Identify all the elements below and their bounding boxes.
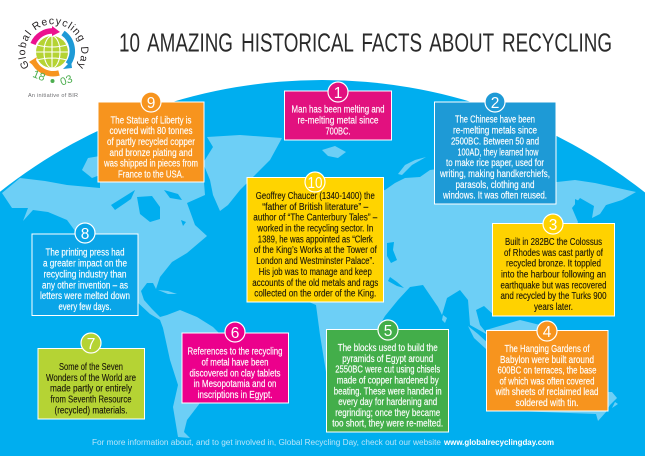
fact 5 text: regrinding; once they became [335,408,441,419]
fact 8 text: a greater impact on the [43,259,127,270]
fact 1 text: 700BC. [326,127,350,138]
fact 10 text: accounts of the old metals and rags [252,278,378,289]
panel: fact 9 [98,92,204,182]
footer: For more information about, and to get involved in, Global Recycling Day, check out our website [92,437,441,447]
fact 2 text: re-melting metals since [453,126,537,137]
badge 4: 4 [543,324,552,341]
panel: fact 3 [492,214,614,316]
fact 7 text: from Seventh Resource [50,394,132,406]
fact 1 text: Man has been melting and [292,105,384,116]
fact 6 text [188,347,282,401]
panel: fact 8 [32,223,138,316]
panel: fact 5 [326,320,448,432]
fact 5 text: pyramids of Egypt around [342,354,433,365]
fact 1 text [292,105,384,138]
fact 9 text: was shipped in pieces from [103,159,198,170]
fact 6 text: discovered on clay tablets [190,368,280,379]
fact 5 text [332,343,443,430]
fact 8 text [40,248,130,313]
fact 6 text: in Mesopotamia and on [194,379,276,390]
footer: www.globalrecyclingday.com [443,437,554,447]
fact 3 text: Built in 282BC the Colossus [505,237,602,248]
panel: fact 1 [284,82,392,140]
fact 7 text: Wonders of the World are [46,373,136,384]
fact 10 text: “father of British literature” – [262,202,369,213]
badge 1: 1 [334,85,342,102]
fact 4 text: of which was often covered [500,376,594,387]
fact 4 text [495,344,598,409]
fact 10 text: Geoffrey Chaucer (1340-1400) the [256,191,375,202]
fact 10 text: author of “The Canterbury Tales” – [253,213,378,224]
fact 3 text: and recycled by the Turks 900 [500,291,607,302]
fact 4 text: Babylon were built around [500,355,594,366]
logo tagline: An initiative of BIR [28,93,78,99]
fact 5 text: beating. These were handed in [334,386,442,397]
badge 7: 7 [87,336,95,353]
fact 2 text: parasols, clothing and [456,180,534,191]
fact 4 text: The Hanging Gardens of [504,344,590,355]
fact 9 text: France to the USA. [118,170,184,181]
fact 9 text: The Statue of Liberty is [110,115,192,126]
fact 9 text: covered with 80 tonnes [110,126,192,137]
fact 5 text: every day for hardening and [338,397,437,408]
fact 4 text: soldered with tin. [516,398,578,409]
panel: fact 2 [434,92,556,204]
logo date: 18 [31,68,47,84]
panel: fact 4 [486,321,608,411]
logo: Global Recycling Day [18,18,88,99]
fact 9 text: of partly recycled copper [107,137,196,148]
fact 3 text [500,237,607,313]
logo date: 03 [59,73,74,89]
fact 9 text [103,115,198,181]
fact 5 text: too short, they were re-melted. [332,419,443,430]
fact 3 text: into the harbour following an [501,270,606,280]
fact 2 text: 100AD, they learned how [458,147,539,158]
fact 8 text: The printing press had [46,248,124,259]
fact 2 text: writing, making handkerchiefs, [439,169,550,180]
logo date [31,68,74,89]
fact 4 text: with sheets of reclaimed lead [495,387,598,398]
fact 7 text [46,362,136,416]
fact 8 text: recycling industry than [44,269,126,280]
panel: fact 10 [247,172,384,302]
fact 6 text: References to the recycling [188,347,282,358]
fact 6 text: of metal have been [202,358,268,368]
fact 8 text: every few days. [58,302,112,313]
fact 2 text: windows. It was often reused. [442,191,547,202]
fact 4 text: 600BC on terraces, the base [498,366,597,377]
fact 2 text: 2500BC. Between 50 and [451,136,539,147]
fact 10 text: worked in the recycling sector. In [257,224,373,234]
fact 2 text: The Chinese have been [455,115,535,126]
fact 3 text: of Rhodes was cast partly of [504,248,603,259]
fact 9 text: and bronze plating and [110,148,192,159]
fact 2 text: to make rice paper, used for [446,158,545,169]
logo wordmark: Global Recycling Day [18,18,88,69]
fact 5 text: The blocks used to build the [338,343,438,354]
fact 7 text: Some of the Seven [59,362,123,373]
fact 3 text: years later. [534,302,573,313]
fact 3 text: earthquake but was recovered [500,280,606,291]
panel: fact 7 [38,333,144,419]
fact 10 text: of the King’s Works at the Tower of [254,245,377,256]
fact 10 text: His job was to manage and keep [259,267,372,278]
fact 10 text [252,191,378,300]
fact 3 text: recycled bronze. It toppled [506,259,601,270]
icon: recycling arrows [29,26,72,74]
fact 7 text: made partly or entirely [50,384,132,395]
fact 5 text: 2550BC were cut using chisels [335,365,440,376]
badge 3: 3 [549,217,557,234]
fact 1 text: re-melting metal since [298,116,379,127]
fact 10 text: collected on the order of the King. [254,289,376,300]
badge 10: 10 [308,175,323,192]
fact 2 text [439,115,550,202]
fact 8 text: letters were melted down [40,291,130,302]
badge 6: 6 [231,325,239,342]
badge 5: 5 [384,323,392,340]
fact 7 text: (recycled) materials. [54,405,128,416]
fact 10 text: 1389, he was appointed as “Clerk [258,234,374,245]
fact 5 text: made of copper hardened by [337,375,439,386]
fact 10 text: London and Westminster Palace”. [256,256,374,267]
badge 9: 9 [147,95,155,112]
panel: fact 6 [182,322,288,403]
badge 2: 2 [491,95,499,112]
fact 8 text: any other invention – as [42,280,128,291]
badge 8: 8 [81,226,89,243]
fact 6 text: inscriptions in Egypt. [198,390,272,401]
icon: globe [36,36,68,68]
